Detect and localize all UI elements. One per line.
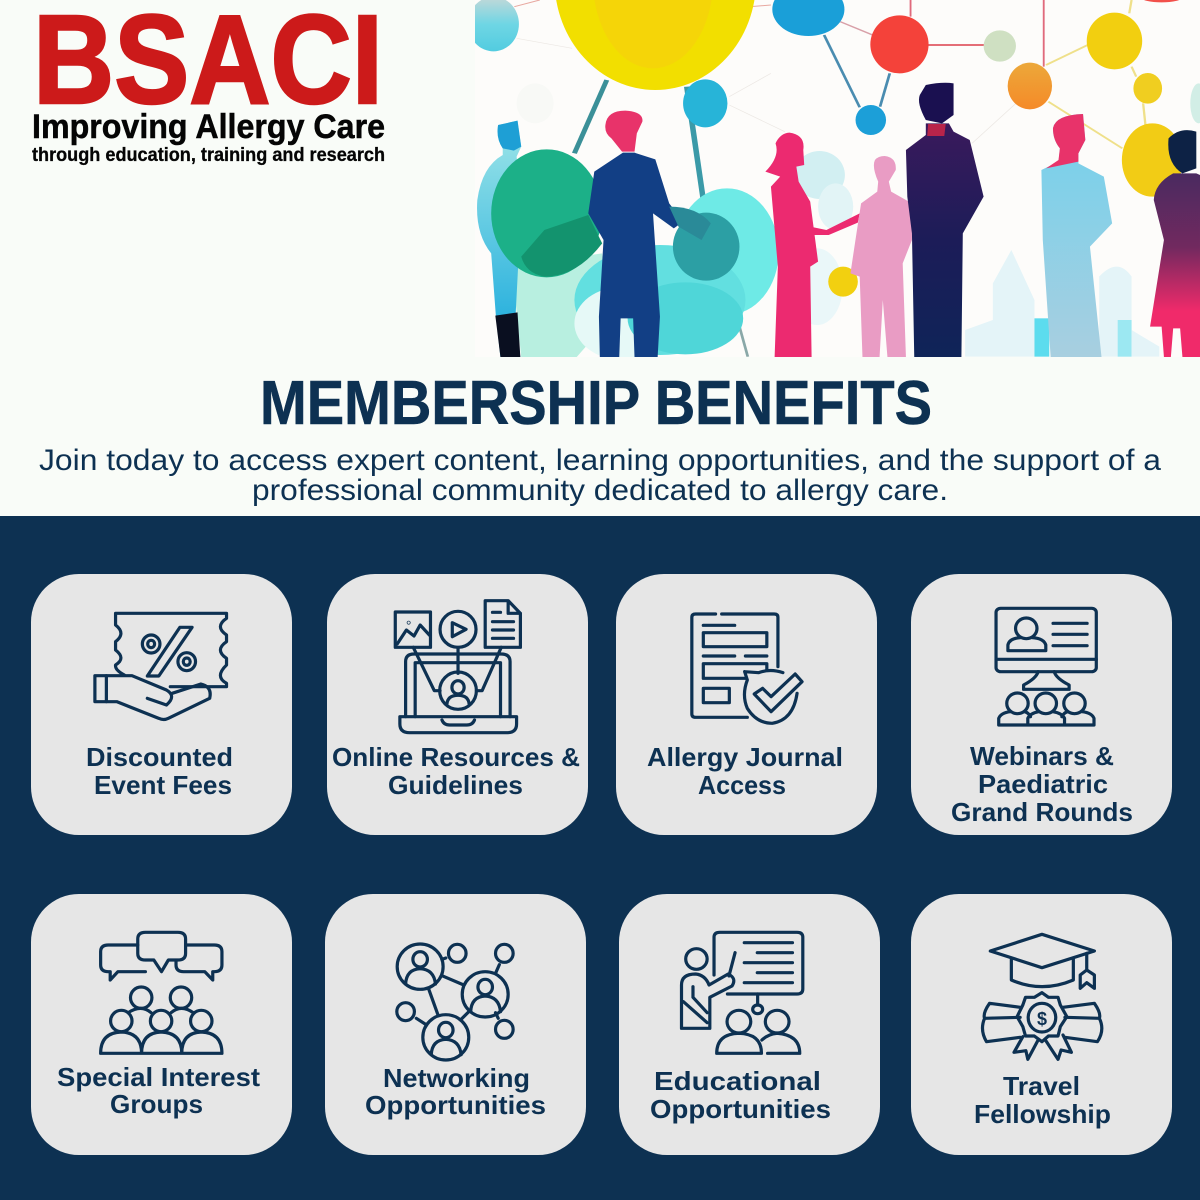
person dark tall <box>906 123 984 357</box>
label: Fellowship <box>974 1099 1111 1129</box>
subtitle: Join today to access expert content, learning opportunities, and the support of a <box>39 444 1161 477</box>
card: Allergy Journal Access <box>616 574 877 835</box>
label: Opportunities <box>650 1094 831 1124</box>
label <box>647 742 843 800</box>
icon: group with speech bubbles <box>101 932 222 1053</box>
label <box>974 1071 1111 1129</box>
label: Access <box>698 770 786 800</box>
label: Guidelines <box>388 770 523 800</box>
person pink <box>765 133 818 357</box>
icon: dollar sign: $ <box>1037 1009 1047 1029</box>
label <box>86 742 233 800</box>
person right edge <box>1150 173 1200 357</box>
green blob <box>491 149 602 277</box>
background circles <box>475 0 519 52</box>
label: Online Resources & <box>332 742 580 772</box>
icon: laptop with media <box>395 601 520 733</box>
logo: BSACI: Improving Allergy Care <box>32 108 385 146</box>
card: Travel Fellowship <box>911 894 1172 1155</box>
label <box>650 1066 831 1124</box>
title: MEMBERSHIP BENEFITS <box>260 369 932 438</box>
subtitle <box>39 444 1161 507</box>
card: Webinars & Paediatric Grand Rounds <box>911 574 1172 835</box>
label: Grand Rounds <box>951 797 1133 827</box>
label: Travel <box>1003 1071 1080 1101</box>
card: Educational Opportunities <box>619 894 880 1155</box>
subtitle: professional community dedicated to allergy care. <box>252 474 948 507</box>
person light pink <box>850 156 912 357</box>
card: Online Resources & Guidelines <box>327 574 588 835</box>
illustration: people and connected network <box>468 0 1200 360</box>
icon: graduation cap and diploma <box>982 934 1102 1059</box>
card: Discounted Event Fees <box>31 574 292 835</box>
teal blobs <box>516 253 602 357</box>
person navy <box>605 111 642 152</box>
label: Allergy Journal <box>647 742 843 772</box>
yellow small circle <box>828 267 858 297</box>
card: Special Interest Groups <box>31 894 292 1155</box>
label: Discounted <box>86 742 233 772</box>
label: Networking <box>383 1063 530 1093</box>
label <box>332 742 580 800</box>
label: Educational <box>654 1066 821 1096</box>
label: Groups <box>110 1089 203 1119</box>
icon: presenter at board <box>682 932 803 1053</box>
label: Event Fees <box>94 770 232 800</box>
logo: BSACI: through education, training and research <box>32 145 385 166</box>
label <box>365 1063 546 1120</box>
label <box>951 741 1133 827</box>
navy benefits panel <box>0 516 1200 1200</box>
label: Webinars & <box>970 741 1114 771</box>
icon: discount ticket in hand <box>95 613 227 719</box>
label <box>57 1062 260 1119</box>
card: Networking Opportunities <box>325 894 586 1155</box>
pale skyline <box>965 250 1159 357</box>
label: Paediatric <box>978 769 1108 799</box>
label: Special Interest <box>57 1062 260 1092</box>
icon: people network <box>397 944 513 1060</box>
icon: journal with checkmark <box>692 614 802 723</box>
person light blue <box>1041 114 1112 357</box>
person far left <box>477 121 521 357</box>
label: Opportunities <box>365 1090 546 1120</box>
icon: webinar monitor and audience <box>996 608 1096 725</box>
